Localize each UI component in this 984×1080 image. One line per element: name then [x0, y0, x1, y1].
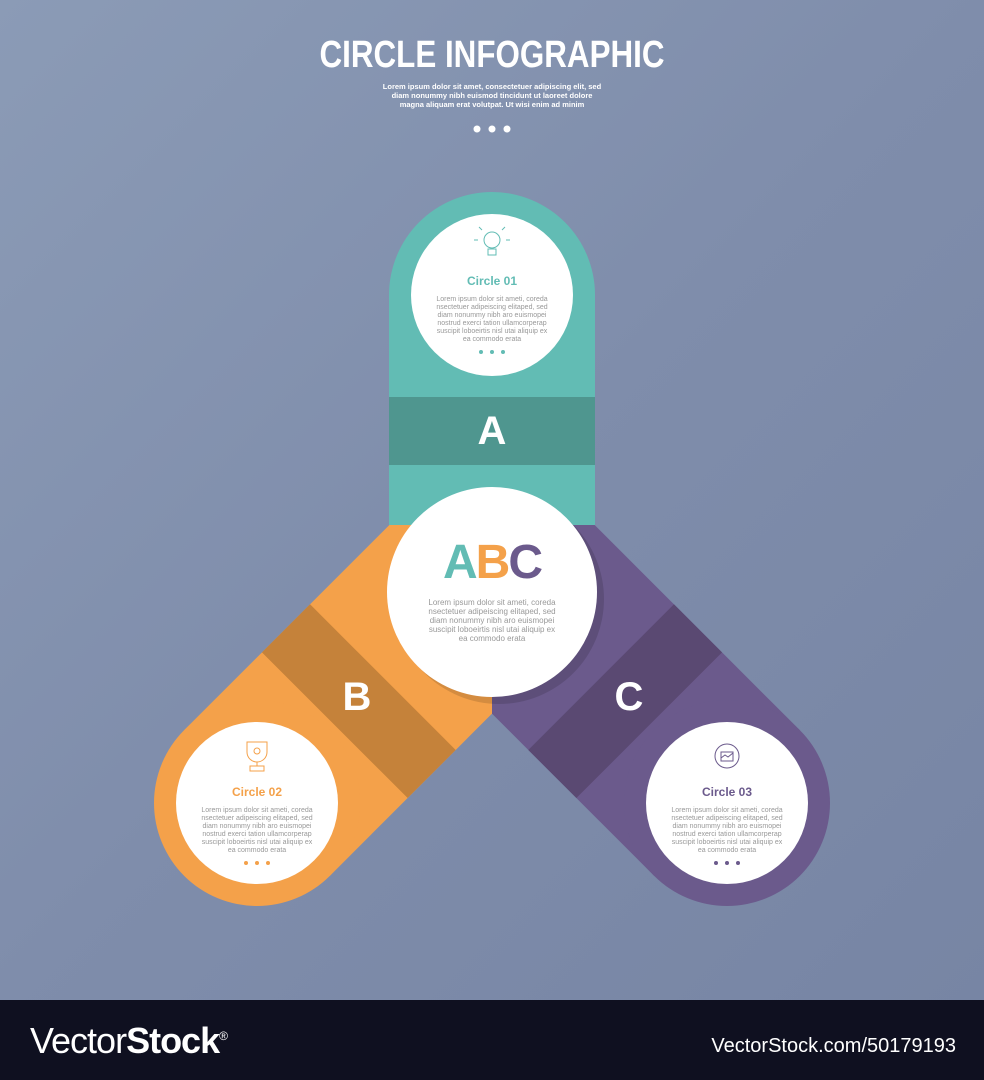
- circle 03 card: [646, 722, 808, 884]
- circle 02 card: nsectetuer adipeiscing elitaped, sed: [201, 815, 313, 822]
- circle 03 card: nostrud exerci tation ullamcorperap: [672, 831, 782, 838]
- footer id: VectorStock.com/50179193: [711, 1035, 956, 1057]
- arm C purple: [492, 525, 830, 906]
- circle 01 card: nsectetuer adipeiscing elitaped, sed: [436, 304, 548, 311]
- icon: lightbulb: [474, 227, 510, 255]
- center circle: nsectetuer adipeiscing elitaped, sed: [428, 607, 556, 616]
- circle 01 card: [411, 214, 573, 376]
- circle 01 card: ea commodo erata: [463, 336, 521, 343]
- circle 02 card: ea commodo erata: [228, 847, 286, 854]
- arm B orange: [154, 525, 492, 906]
- center circle: diam nonummy nibh aro euismopei: [430, 616, 554, 625]
- center circle: Lorem ipsum dolor sit ameti, coreda: [428, 598, 556, 607]
- circle 03 card: nsectetuer adipeiscing elitaped, sed: [671, 815, 783, 822]
- letter C: C: [615, 675, 643, 719]
- letter A: A: [478, 409, 506, 453]
- title: CIRCLE INFOGRAPHIC: [320, 34, 664, 76]
- arm A teal: [389, 192, 595, 525]
- circle 02 card: [176, 722, 338, 884]
- footer bar: [0, 1000, 984, 1080]
- circle 01 card: suscipit loboeirtis nisl utai aliquip ex: [437, 328, 548, 335]
- subtitle text: Lorem ipsum dolor sit amet, consectetuer adipiscing elit, sed: [383, 82, 602, 91]
- circle 03 card: suscipit loboeirtis nisl utai aliquip ex: [672, 839, 783, 846]
- icon: trophy: [247, 742, 267, 771]
- subtitle text: [383, 82, 602, 109]
- circle 02 card: diam nonummy nibh aro euismopei: [203, 823, 312, 830]
- title dots: [474, 126, 510, 132]
- circle 02 card: Circle 02: [232, 785, 282, 799]
- subtitle text: magna aliquam erat volutpat. Ut wisi enim ad minim: [400, 100, 585, 109]
- center circle: suscipit loboeirtis nisl utai aliquip ex: [429, 625, 555, 634]
- circle 01 card: Circle 01: [467, 274, 517, 288]
- icon: chart: [715, 744, 739, 768]
- circle 03 card: diam nonummy nibh aro euismopei: [673, 823, 782, 830]
- footer logo: VectorStock®: [30, 1020, 227, 1061]
- circle 02 card: suscipit loboeirtis nisl utai aliquip ex: [202, 839, 313, 846]
- center circle: ABC: [443, 536, 542, 589]
- subtitle text: diam nonummy nibh euismod tincidunt ut laoreet dolore: [392, 91, 592, 100]
- circle 02 card: Lorem ipsum dolor sit ameti, coreda: [201, 807, 313, 814]
- main diagram: [154, 40, 830, 906]
- circle 02 card: nostrud exerci tation ullamcorperap: [202, 831, 312, 838]
- circle 03 card: ea commodo erata: [698, 847, 756, 854]
- circle 03 card: Circle 03: [702, 785, 752, 799]
- center circle: ea commodo erata: [459, 634, 526, 643]
- circle 03 card: Lorem ipsum dolor sit ameti, coreda: [671, 807, 783, 814]
- center circle: [387, 487, 604, 704]
- circle 01 card: nostrud exerci tation ullamcorperap: [437, 320, 547, 327]
- circle 01 card: diam nonummy nibh aro euismopei: [438, 312, 547, 319]
- circle 01 card: Lorem ipsum dolor sit ameti, coreda: [436, 296, 548, 303]
- letter B: B: [343, 675, 371, 719]
